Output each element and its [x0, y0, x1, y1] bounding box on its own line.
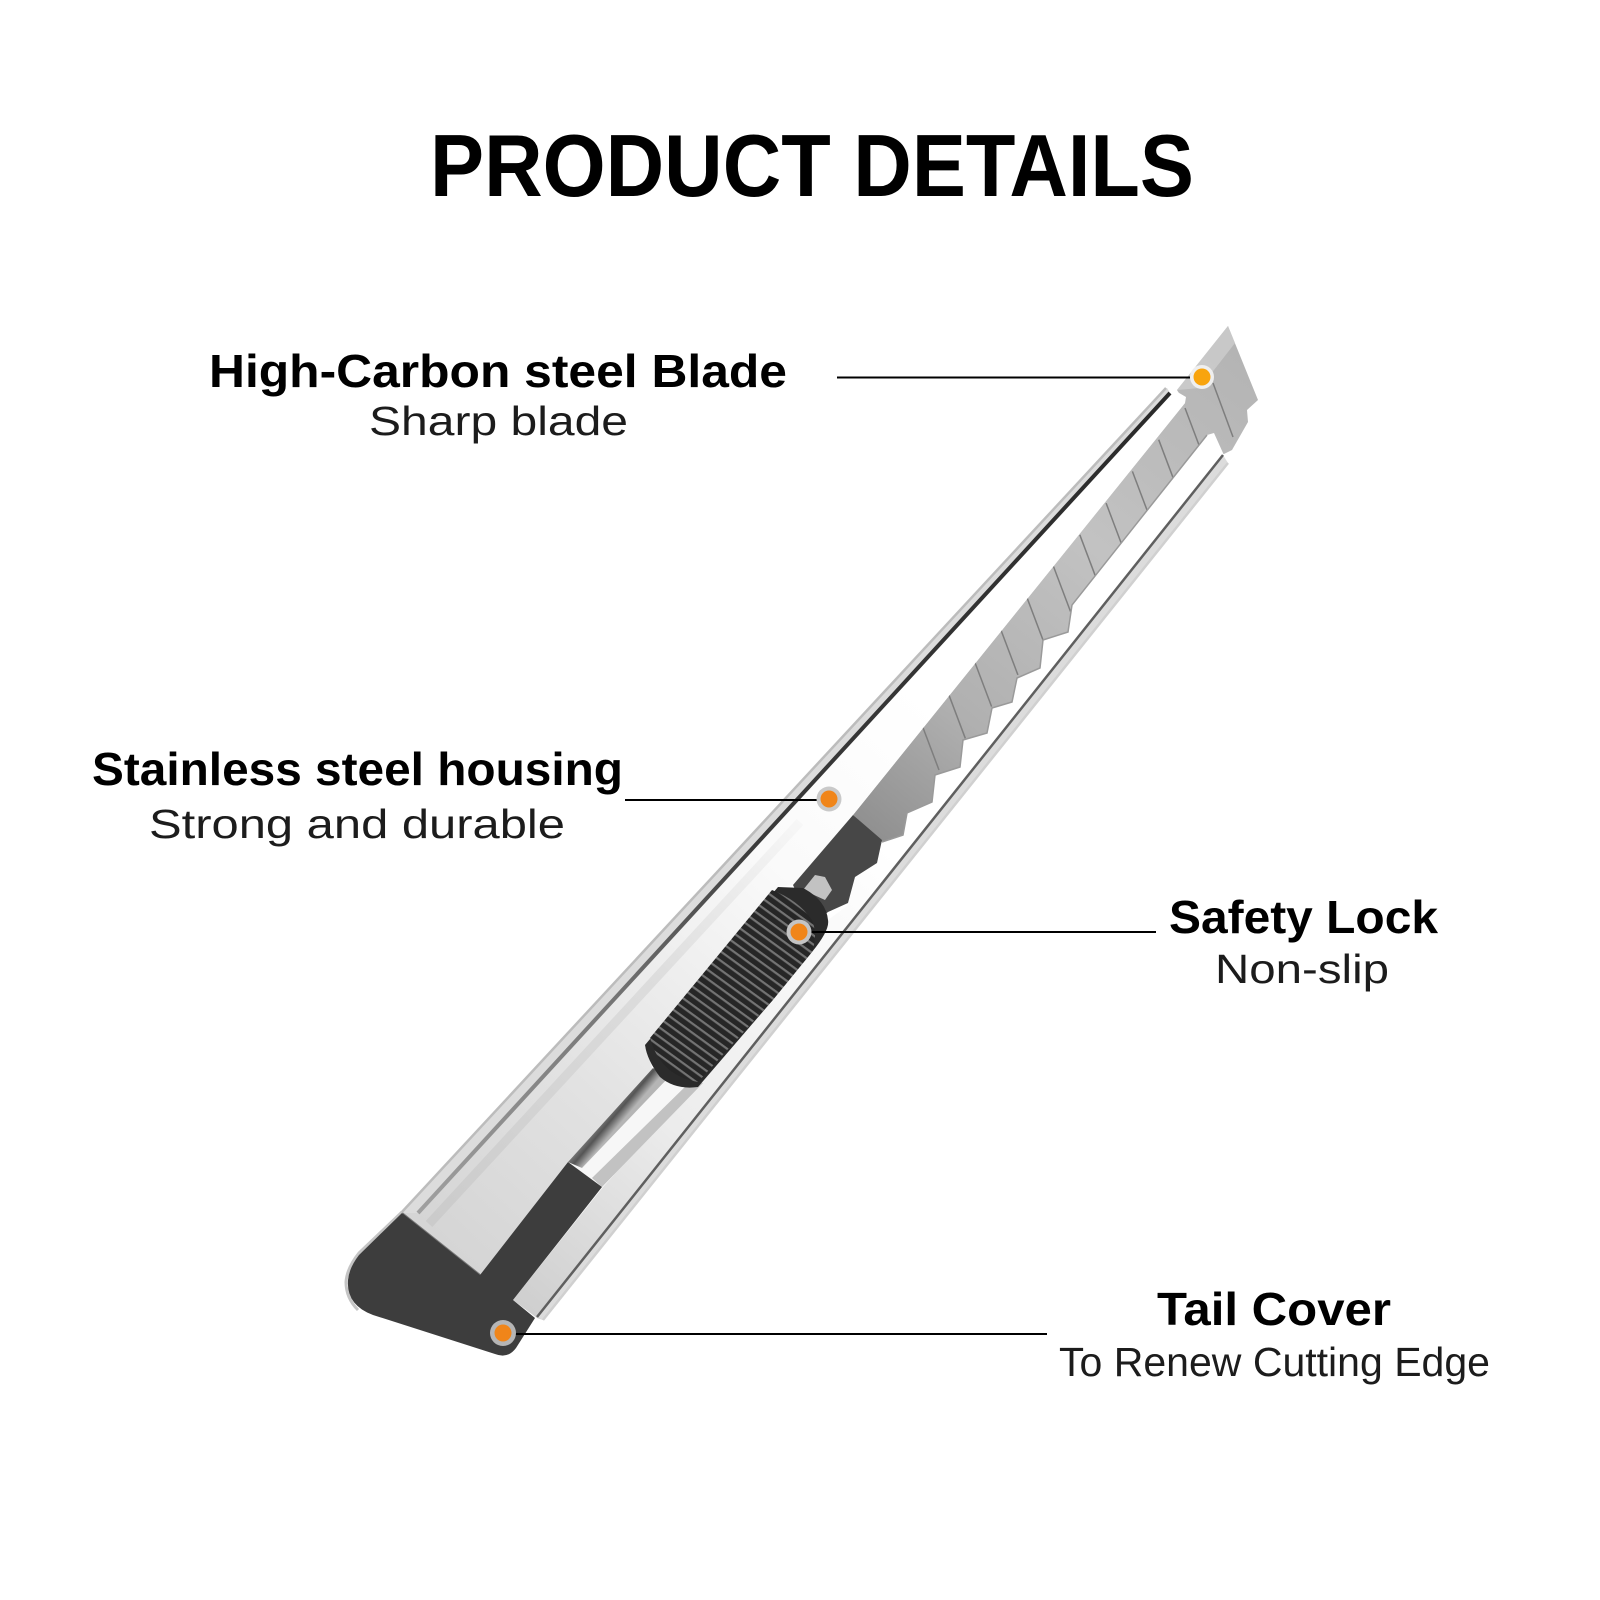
- illustration: utility knife: [346, 326, 1258, 1356]
- callout: stainless steel housing: [92, 743, 842, 847]
- track slot: [568, 1068, 703, 1187]
- callout: stainless steel housing: Stainless steel housing: [92, 743, 623, 795]
- safety lock grip: [645, 887, 828, 1088]
- callout: tail cover: Tail Cover: [1157, 1283, 1391, 1335]
- callout: high-carbon steel blade: Sharp blade: [369, 398, 628, 444]
- callout: stainless steel housing: Strong and durable: [149, 801, 565, 847]
- callout: safety lock: Safety Lock: [1169, 891, 1438, 943]
- blade: [853, 326, 1258, 842]
- lower rail: [513, 433, 1228, 1320]
- tail cover: [346, 1162, 602, 1356]
- callout: safety lock: Non-slip: [1215, 946, 1389, 992]
- callout: high-carbon steel blade: High-Carbon steel Blade: [209, 345, 787, 397]
- callout: tail cover: To Renew Cutting Edge: [1059, 1339, 1490, 1385]
- callout: high-carbon steel blade: [209, 345, 1214, 444]
- callout: tail cover: [490, 1283, 1490, 1385]
- callout: safety lock: [786, 891, 1438, 992]
- blade slider: [793, 815, 882, 925]
- infographic: product details: [93, 134, 1488, 1384]
- upper housing: [401, 388, 1186, 1275]
- title: PRODUCT DETAILS: [430, 116, 1194, 215]
